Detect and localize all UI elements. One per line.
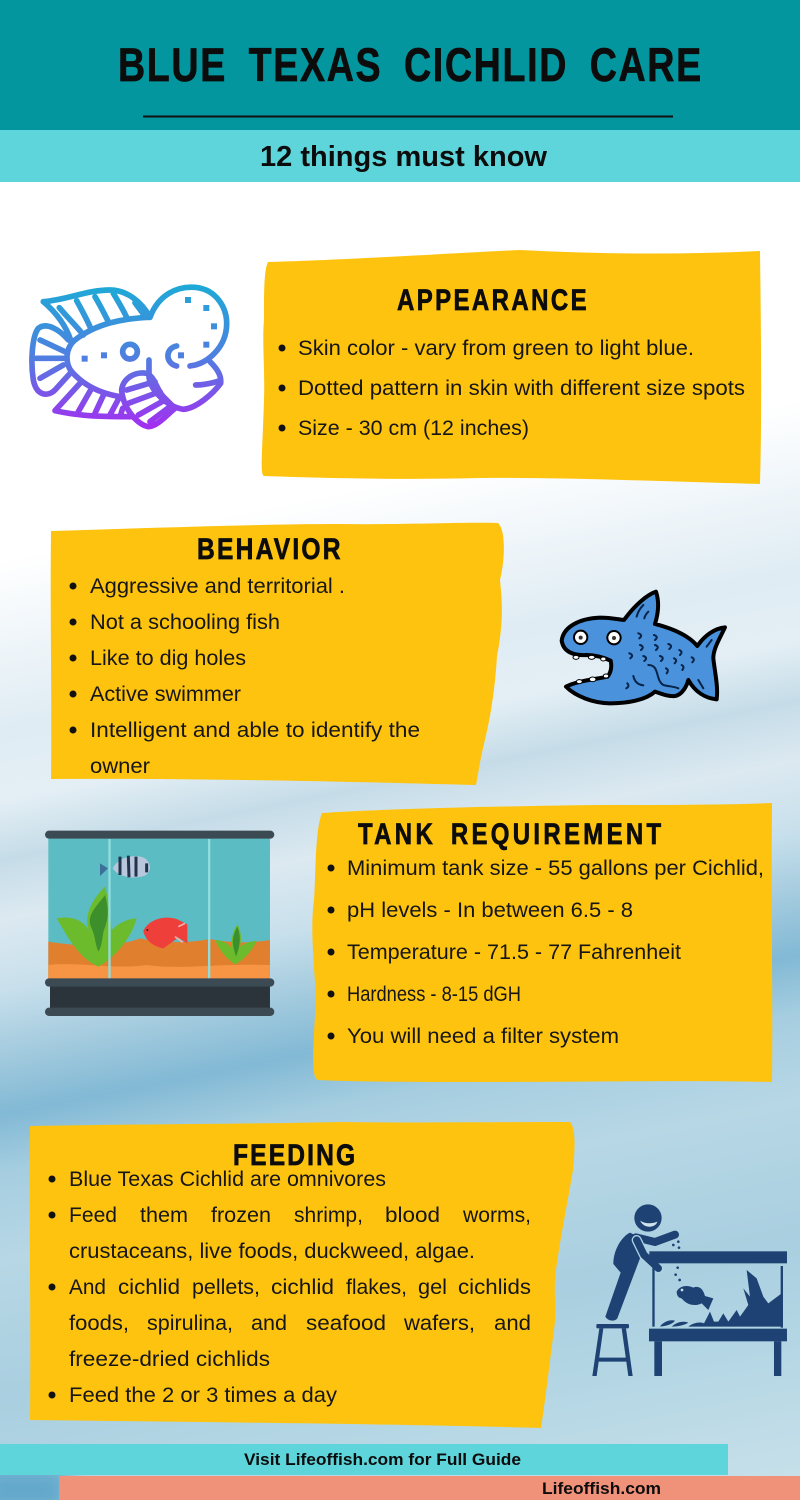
list: tank requirement: pH levels - In between 6.5 - 8: [347, 899, 633, 922]
icon: aquarium tank: [45, 831, 274, 1016]
list: feeding: cichlids: [458, 1276, 531, 1299]
subtitle band: 12 things must know: [260, 141, 547, 173]
list: behavior: Aggressive and territorial .: [90, 575, 345, 598]
list: appearance: Skin color - vary from green to light blue.: [298, 337, 694, 360]
list: feeding: gel: [418, 1276, 447, 1299]
footer band: guide link: [0, 1444, 728, 1475]
list: feeding: worms,: [462, 1204, 531, 1227]
list: feeding: frozen: [211, 1204, 271, 1227]
title: BLUE TEXAS CICHLID CARE: [118, 39, 701, 92]
list: feeding: flakes,: [346, 1276, 407, 1299]
list: feeding: [48, 1168, 531, 1407]
list: feeding: crustaceans, live foods, duckweed, algae.: [69, 1240, 475, 1263]
list: behavior: [70, 575, 420, 778]
footer band: guide link: Visit Lifeoffish.com for Full Guide: [244, 1450, 521, 1469]
list: tank requirement: [328, 857, 764, 1048]
list: feeding: and: [251, 1312, 287, 1335]
list: feeding: cichlid: [118, 1276, 180, 1299]
footer band: site name: Lifeoffish.com: [542, 1479, 661, 1498]
panel: behavior: [51, 523, 504, 785]
list: appearance: Size - 30 cm (12 inches): [298, 417, 529, 440]
list: tank requirement: You will need a filter system: [347, 1025, 619, 1048]
heading: tank requirement: TANK REQUIREMENT: [358, 816, 662, 851]
list: tank requirement: Hardness - 8-15 dGH: [347, 983, 521, 1006]
list: behavior: Not a schooling fish: [90, 611, 280, 634]
panel: feeding: [30, 1122, 575, 1428]
icon: person feeding fish tank: [592, 1204, 787, 1376]
panel: tank requirement: [312, 803, 772, 1082]
list: feeding: wafers,: [403, 1312, 475, 1335]
list: feeding: spirulina,: [147, 1312, 233, 1335]
list: behavior: Intelligent and able to identify the: [90, 719, 420, 742]
panel: appearance: [262, 250, 761, 484]
list: feeding: them: [140, 1204, 188, 1227]
list: tank requirement: Temperature - 71.5 - 77 Fahrenheit: [347, 941, 681, 964]
heading: feeding: FEEDING: [233, 1138, 355, 1172]
list: feeding: foods,: [69, 1312, 129, 1335]
footer band: site name: [59, 1476, 800, 1500]
list: appearance: [278, 337, 745, 440]
icon: blue outline fish: [32, 287, 227, 427]
list: feeding: Feed the 2 or 3 times a day: [69, 1384, 338, 1407]
list: behavior: Like to dig holes: [90, 647, 246, 670]
list: feeding: pellets,: [192, 1276, 260, 1299]
header band: [0, 0, 800, 130]
list: feeding: Blue Texas Cichlid are omnivores: [69, 1168, 386, 1191]
icon: cartoon blue fish: [562, 592, 725, 703]
list: feeding: Feed: [69, 1204, 117, 1227]
subtitle band: [0, 130, 800, 182]
list: behavior: Active swimmer: [90, 683, 241, 706]
heading: appearance: APPEARANCE: [397, 282, 587, 317]
list: appearance: Dotted pattern in skin with different size spots: [298, 377, 745, 400]
list: feeding: seafood: [306, 1312, 386, 1335]
list: feeding: And: [69, 1276, 106, 1299]
list: feeding: blood: [385, 1204, 440, 1227]
list: feeding: cichlid: [271, 1276, 334, 1299]
list: feeding: and: [494, 1312, 531, 1335]
list: tank requirement: Minimum tank size - 55 gallons per Cichlid,: [347, 857, 764, 880]
list: feeding: freeze-dried cichlids: [69, 1348, 270, 1371]
list: behavior: owner: [90, 755, 150, 778]
heading: behavior: BEHAVIOR: [197, 532, 341, 566]
list: feeding: shrimp,: [294, 1204, 363, 1227]
